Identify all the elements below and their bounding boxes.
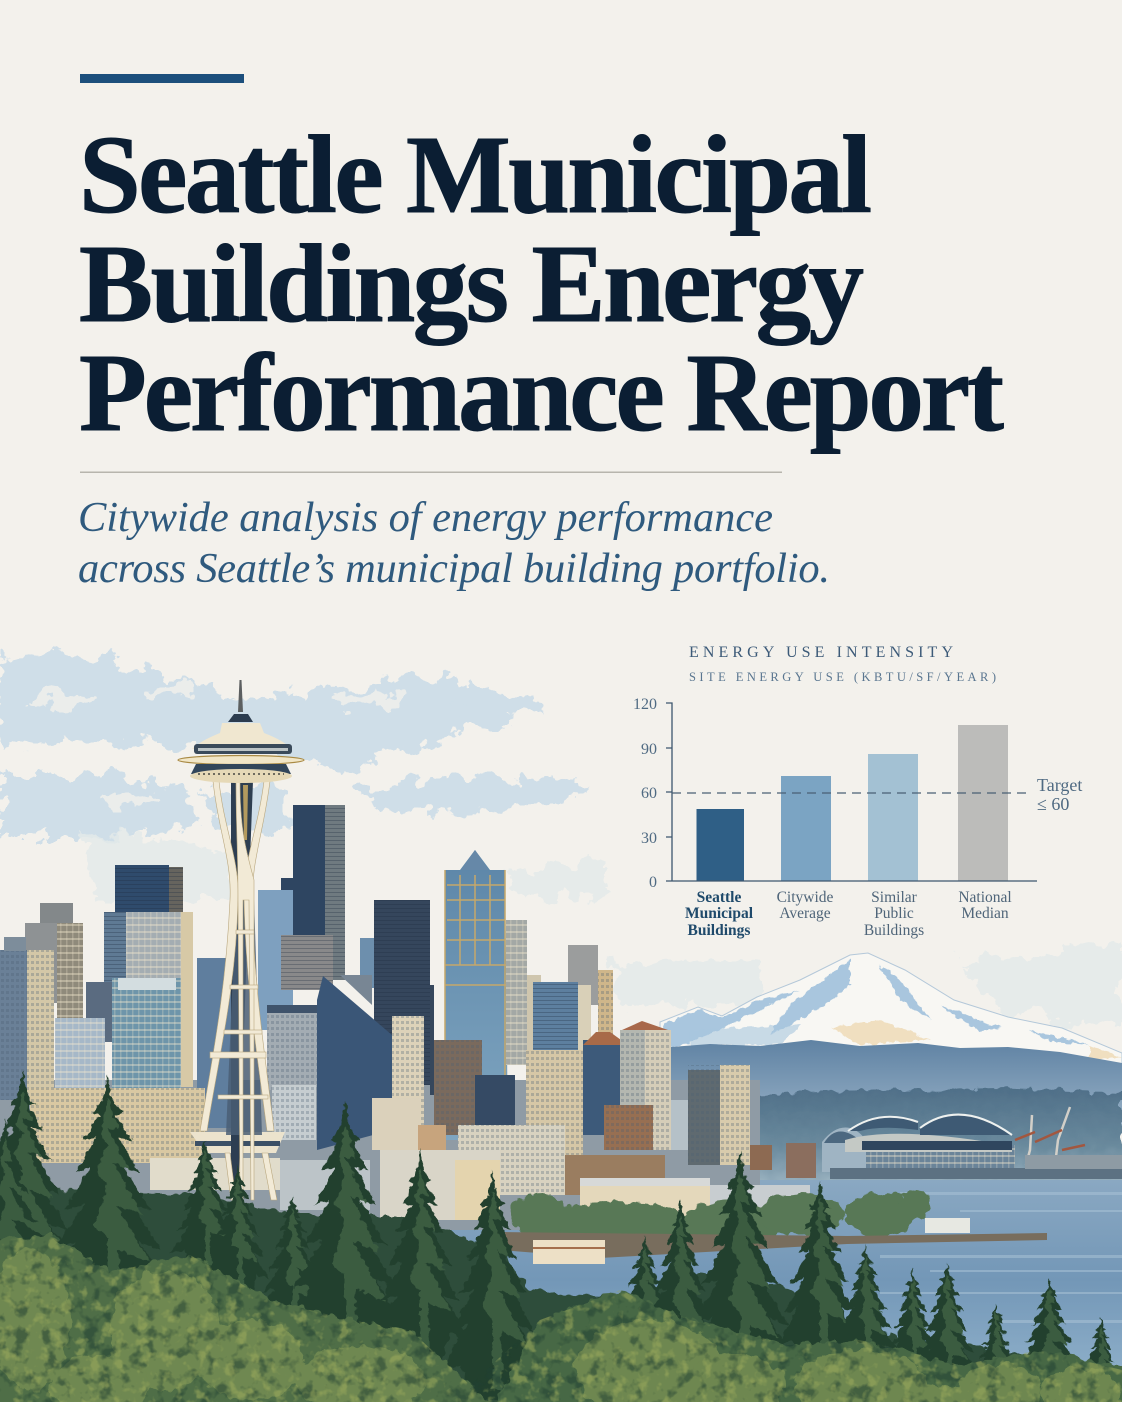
category labels: Buildings — [688, 922, 750, 939]
y axis labels — [633, 696, 657, 891]
y axis labels: 90 — [641, 741, 657, 758]
chart: energy use intensity — [633, 644, 1082, 939]
forest backfill — [0, 1150, 1122, 1402]
title: Performance Report — [79, 332, 1004, 455]
y axis labels: 60 — [641, 785, 657, 802]
skyline low front buildings — [30, 1085, 810, 1220]
category labels: Seattle — [697, 889, 741, 906]
category labels: Public — [874, 905, 914, 922]
category labels: Municipal — [685, 905, 754, 922]
target label: Target — [1037, 775, 1082, 795]
title divider — [80, 472, 782, 473]
foreground deciduous trees — [0, 1230, 1122, 1402]
accent bar — [80, 74, 244, 83]
title — [79, 114, 1004, 455]
bar: Similar Public Buildings — [868, 754, 918, 881]
stadium and cranes — [822, 1107, 1122, 1179]
foothills — [671, 1040, 1122, 1130]
y axis labels: 120 — [633, 696, 657, 713]
subtitle — [78, 494, 830, 592]
fir trees — [0, 1070, 1122, 1400]
bar: Citywide Average — [781, 776, 831, 881]
title: Seattle Municipal — [79, 114, 872, 237]
subtitle: across Seattle’s municipal building portfolio. — [78, 545, 830, 592]
bar: Seattle Municipal Buildings — [696, 809, 744, 881]
water — [440, 1180, 1122, 1380]
y axis labels: 30 — [641, 830, 657, 847]
title: Buildings Energy — [79, 223, 864, 346]
illustration: Seattle skyline — [0, 650, 1122, 1402]
chart title: ENERGY USE INTENSITY — [689, 644, 953, 661]
category labels — [685, 889, 1012, 939]
axes — [666, 703, 1037, 881]
category labels: Average — [779, 905, 831, 922]
subtitle: Citywide analysis of energy performance — [78, 494, 773, 541]
category labels: Median — [961, 905, 1009, 922]
category labels: Similar — [871, 889, 918, 906]
category labels: National — [958, 889, 1012, 906]
shore trees and pier — [500, 1191, 1047, 1264]
skyline base fill — [0, 1080, 760, 1230]
target label — [1037, 775, 1082, 814]
mountain: Rainier — [660, 953, 1122, 1090]
chart subtitle: SITE ENERGY USE (KBTU/SF/YEAR) — [689, 670, 996, 684]
target label: ≤ 60 — [1037, 794, 1069, 814]
sky clouds — [0, 650, 1122, 1030]
category labels: Buildings — [864, 922, 924, 939]
bar: National Median — [958, 725, 1008, 881]
y axis labels: 0 — [649, 874, 657, 891]
skyline mid buildings — [0, 935, 816, 1178]
far treeline — [740, 1088, 1122, 1185]
category labels: Citywide — [777, 889, 834, 906]
target line — [672, 792, 1031, 794]
space needle — [178, 680, 304, 1200]
skyline back towers — [25, 805, 613, 1140]
